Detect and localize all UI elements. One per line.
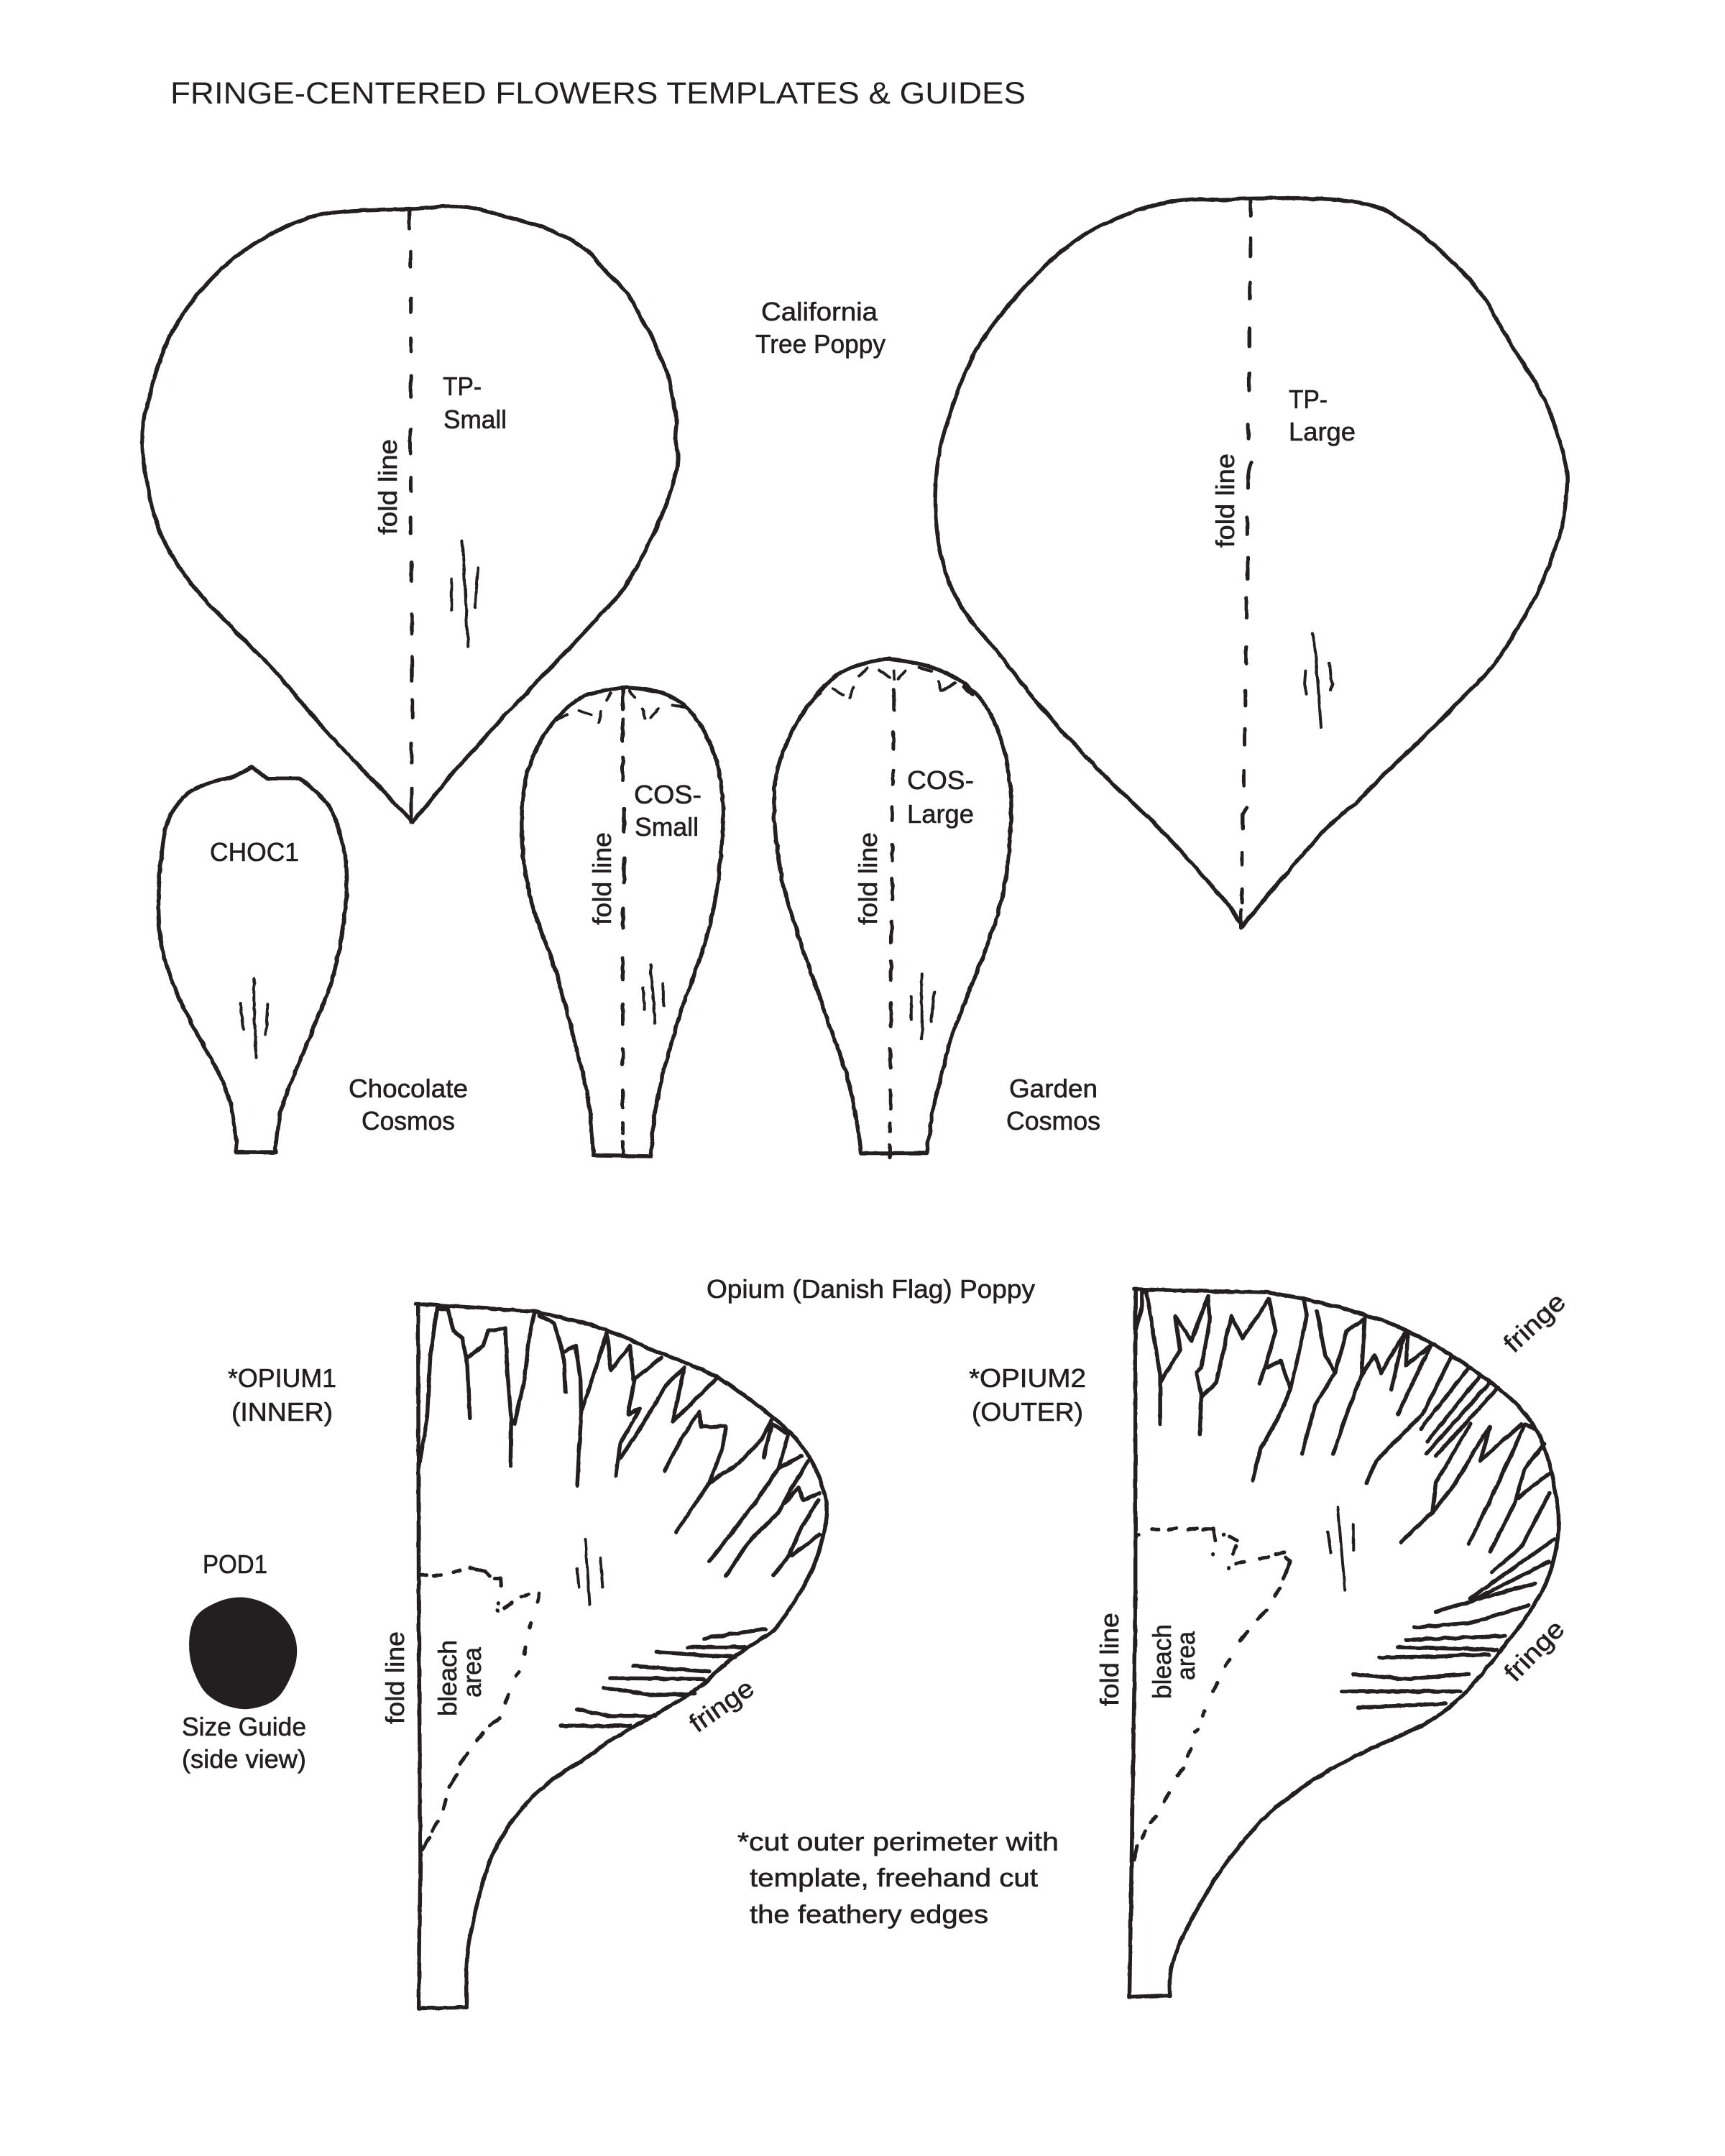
note: cutting instructions: template, freehand cut [750, 1863, 1038, 1892]
bleach area boundary [1133, 1528, 1291, 1861]
species label: Garden Cosmos: Cosmos [1006, 1106, 1100, 1135]
label: COS-Large [907, 765, 974, 829]
petal template: OPIUM2 [1095, 1286, 1571, 1997]
label: Size Guide (side view): Size Guide [182, 1712, 306, 1741]
petal template: TP-Small [142, 206, 678, 822]
label: Size Guide (side view): (side view) [182, 1744, 306, 1774]
note: cutting instructions: *cut outer perimeter with [737, 1827, 1059, 1856]
label: bleach area [433, 1640, 487, 1716]
label: bleach area: bleach [1147, 1624, 1177, 1699]
label: fold line: fold line [1095, 1613, 1124, 1706]
label: bleach area: bleach [433, 1640, 462, 1716]
label: *OPIUM2 (OUTER) [969, 1363, 1086, 1427]
label: TP-Small: Small [443, 405, 507, 434]
note: cutting instructions: the feathery edges [750, 1899, 988, 1929]
label: *OPIUM1 (INNER) [228, 1363, 336, 1427]
label: TP-Small: TP- [443, 372, 482, 401]
species label: Chocolate Cosmos: Cosmos [362, 1106, 455, 1135]
petal template: TP-Large [935, 198, 1568, 928]
label: fringe: fringe [684, 1673, 760, 1738]
label: COS-Large: COS- [907, 765, 974, 795]
label: fold line: fold line [373, 439, 402, 535]
label: bleach area [1147, 1624, 1200, 1699]
label: fringe top: fringe [1497, 1286, 1571, 1358]
species label: California Tree Poppy: Tree Poppy [755, 329, 886, 359]
feathery fringe cuts [419, 1309, 820, 1726]
label: TP-Large: Large [1289, 417, 1356, 446]
species label: Chocolate Cosmos [349, 1074, 468, 1135]
title: FRINGE-CENTERED FLOWERS TEMPLATES & GUIDES [170, 76, 1026, 111]
label: fold line: fold line [1210, 453, 1240, 548]
label: TP-Large: TP- [1289, 384, 1328, 414]
label: COS-Large: Large [907, 799, 974, 829]
label: *OPIUM2 (OUTER): *OPIUM2 [969, 1363, 1086, 1393]
note: cutting instructions [737, 1827, 1059, 1929]
icon: POD1 size guide [182, 1549, 306, 1774]
label: fringe bottom: fringe [1498, 1614, 1570, 1687]
bleach area boundary [420, 1567, 539, 1850]
label: POD1: POD1 [203, 1549, 267, 1579]
label: bleach area: area [457, 1646, 487, 1697]
label: fold line: fold line [380, 1631, 410, 1724]
label: CHOC1: CHOC1 [210, 837, 299, 867]
label: bleach area: area [1171, 1631, 1200, 1680]
label: TP-Small [443, 372, 507, 434]
species label: Chocolate Cosmos: Chocolate [349, 1074, 468, 1103]
label: COS-Small: Small [635, 812, 699, 842]
petal template: CHOC1 [159, 767, 347, 1152]
label: *OPIUM2 (OUTER): (OUTER) [972, 1397, 1083, 1427]
species label: Opium (Danish Flag) Poppy: Opium (Danish Flag) Poppy [707, 1274, 1035, 1304]
label: fold line: fold line [587, 832, 617, 925]
petal template: COS-Large [774, 659, 1011, 1157]
label: fold line: fold line [853, 832, 883, 925]
label: Size Guide (side view) [182, 1712, 306, 1774]
feathery fringe cuts [1136, 1291, 1555, 1708]
species label: California Tree Poppy: California [761, 297, 878, 326]
label: COS-Small [634, 780, 702, 842]
petal template: OPIUM1 [380, 1304, 827, 2009]
species label: Garden Cosmos [1006, 1074, 1100, 1135]
species label: Garden Cosmos: Garden [1009, 1074, 1098, 1103]
label: COS-Small: COS- [634, 780, 702, 809]
label: *OPIUM1 (INNER): (INNER) [231, 1397, 333, 1427]
label: TP-Large [1289, 384, 1356, 446]
species label: California Tree Poppy [755, 297, 886, 359]
petal template: COS-Small [522, 687, 723, 1156]
label: *OPIUM1 (INNER): *OPIUM1 [228, 1363, 336, 1393]
